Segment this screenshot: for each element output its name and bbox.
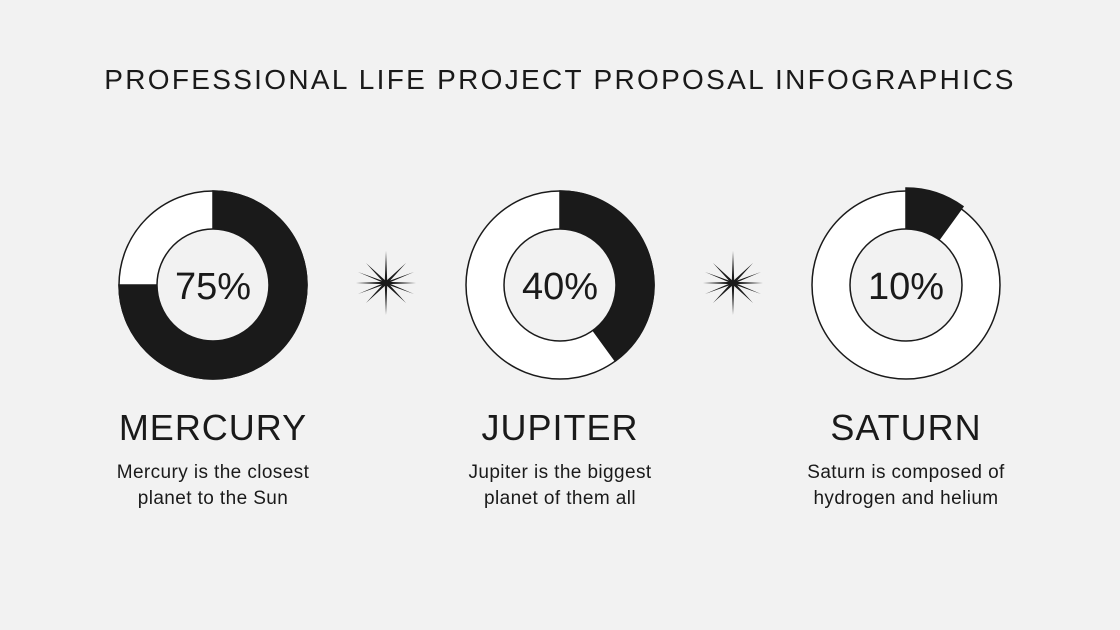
icon: star 1: [356, 251, 416, 315]
donut: saturn 10%: [812, 188, 1000, 379]
text: saturn: Saturn is composed of: [807, 462, 1005, 483]
donut: mercury 75%: 75%: [175, 266, 251, 308]
heading: jupiter: JUPITER: [481, 407, 638, 448]
heading: saturn: SATURN: [830, 407, 982, 448]
text: mercury: planet to the Sun: [138, 488, 288, 509]
text: saturn: [807, 462, 1005, 509]
text: jupiter: planet of them all: [484, 488, 636, 509]
title: PROFESSIONAL LIFE PROJECT PROPOSAL INFOGRAPHICS: [104, 64, 1016, 95]
text: mercury: [117, 462, 309, 509]
donut: saturn 10%: 10%: [868, 266, 944, 308]
text: jupiter: Jupiter is the biggest: [468, 462, 652, 483]
text: saturn: hydrogen and helium: [813, 488, 999, 509]
donut: jupiter 40%: [466, 191, 654, 379]
heading: mercury: MERCURY: [119, 407, 307, 448]
icon: star 2: [703, 251, 763, 315]
donut: mercury 75%: [119, 191, 307, 379]
donut: jupiter 40%: 40%: [522, 266, 598, 308]
text: mercury: Mercury is the closest: [117, 462, 309, 483]
text: jupiter: [468, 462, 652, 509]
